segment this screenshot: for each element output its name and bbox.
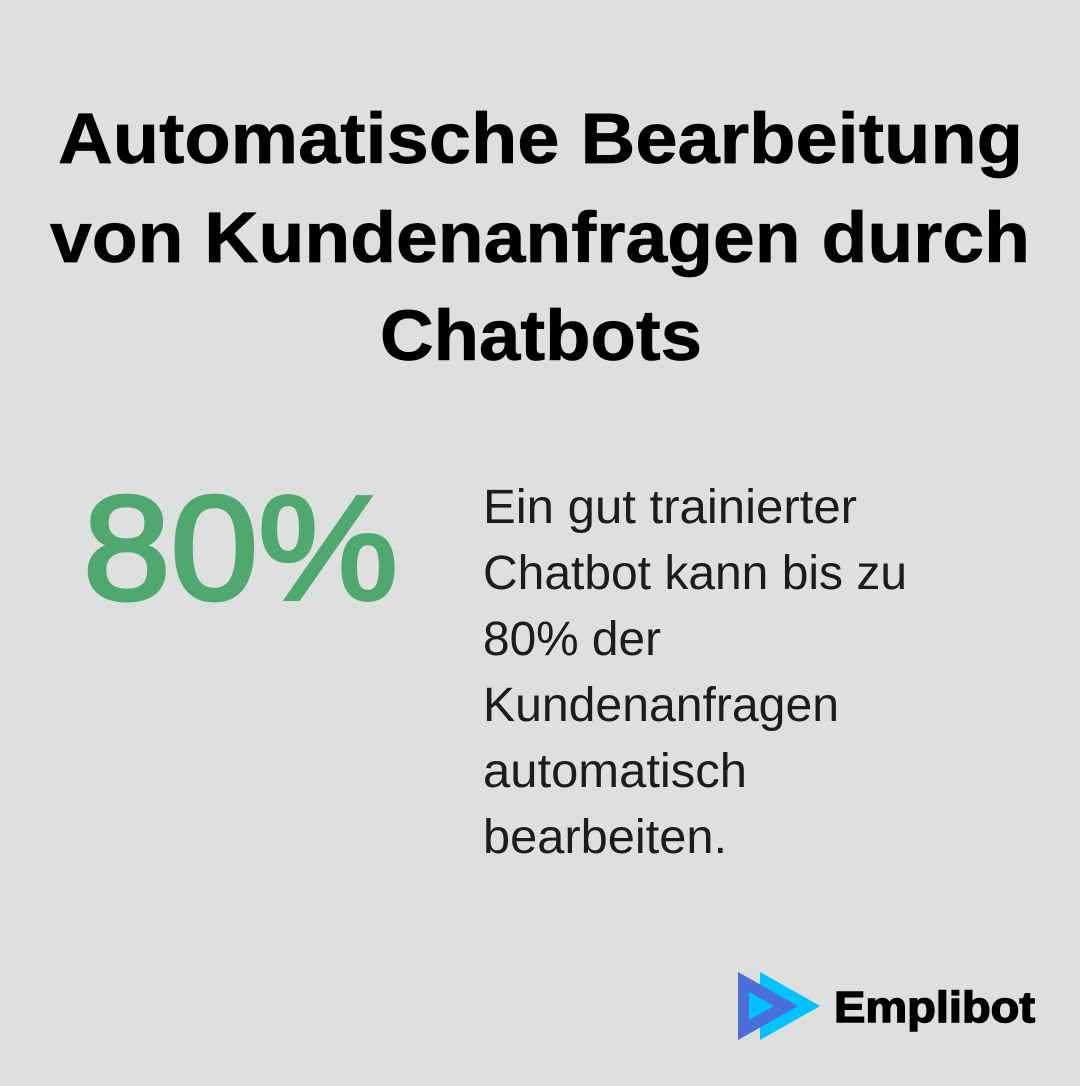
title: Chatbots (380, 297, 702, 376)
description text: Ein gut trainierter (483, 481, 857, 534)
description text: Chatbot kann bis zu (483, 547, 907, 600)
title (50, 100, 1030, 376)
title: von Kundenanfragen durch (50, 199, 1030, 278)
big statistic: 80%: 80% (83, 466, 398, 631)
description text: automatisch (483, 745, 747, 798)
description text: bearbeiten. (483, 811, 727, 864)
description text: Kundenanfragen (483, 679, 839, 732)
logo: Emplibot (738, 972, 1035, 1040)
description text: 80% der (483, 613, 661, 666)
icon: play triangles (738, 972, 820, 1040)
title: Automatische Bearbeitung (58, 100, 1023, 179)
description text (483, 481, 907, 864)
wordmark: Emplibot (834, 983, 1035, 1032)
